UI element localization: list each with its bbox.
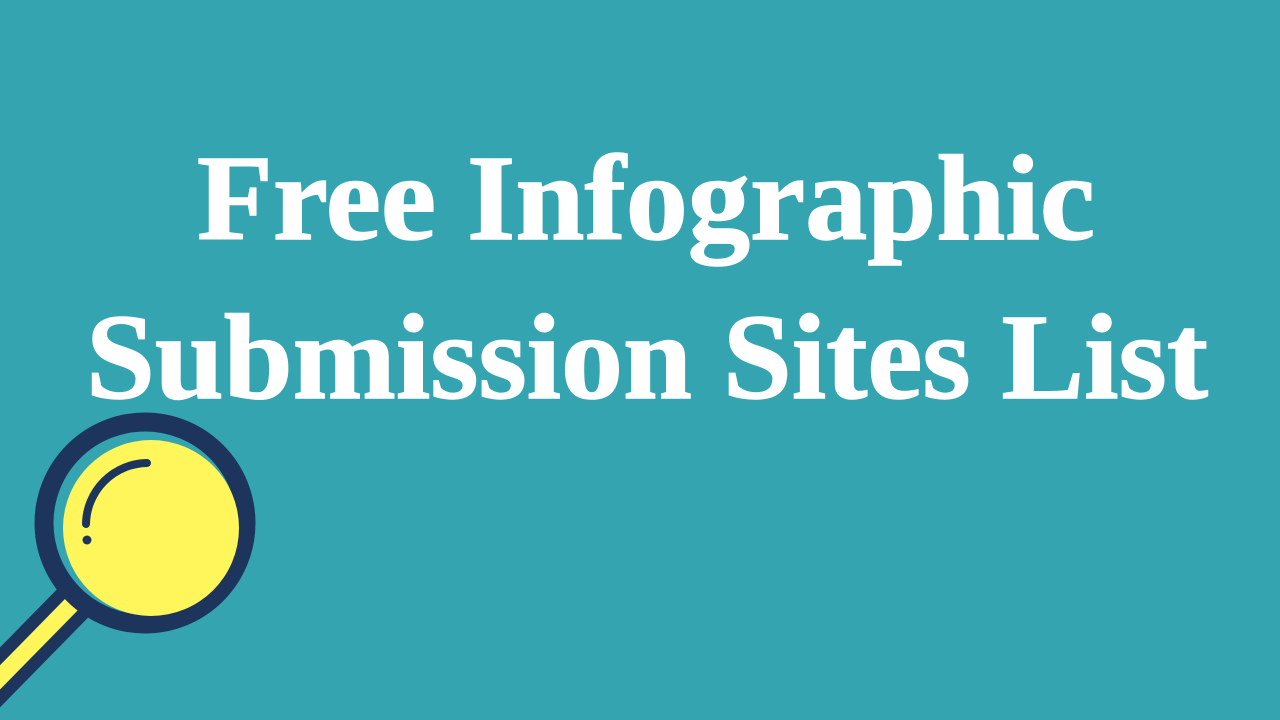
title	[86, 131, 1208, 425]
lens ring	[44, 422, 246, 624]
handle	[0, 604, 72, 708]
highlight	[86, 463, 147, 524]
lens glass	[63, 440, 239, 616]
title line 2: Submission Sites List	[86, 290, 1208, 425]
title line 1: Free Infographic	[197, 131, 1095, 266]
icon: magnifying glass	[0, 422, 246, 708]
